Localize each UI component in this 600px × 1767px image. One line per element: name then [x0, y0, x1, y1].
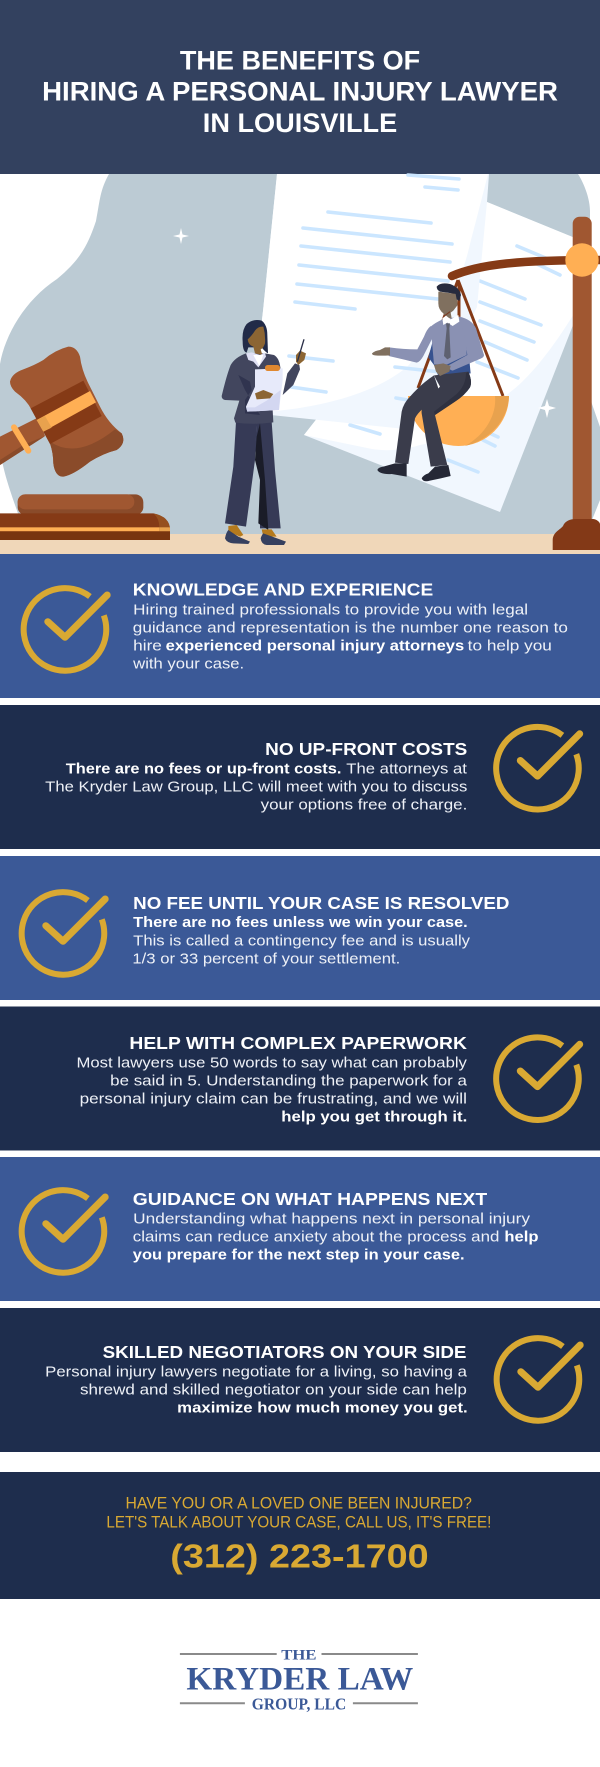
title	[42, 46, 558, 138]
heading: SKILLED NEGOTIATORS ON YOUR SIDE	[103, 1342, 467, 1362]
panel: illustration	[0, 174, 600, 554]
text block	[45, 760, 468, 813]
text block: help	[504, 1228, 538, 1245]
text block: experienced personal injury attorneys	[166, 637, 464, 654]
heading: GUIDANCE ON WHAT HAPPENS NEXT	[133, 1189, 488, 1209]
panel: knowledge and experience	[0, 554, 600, 698]
text block: claims can reduce anxiety about the process and	[133, 1228, 499, 1245]
logo: The Kryder Law Group, LLC: KRYDER LAW	[186, 1661, 413, 1697]
text block: maximize how much money you get.	[177, 1399, 468, 1416]
title: IN LOUISVILLE	[203, 108, 397, 138]
panel: guidance on what happens next	[0, 1157, 600, 1301]
text block: Understanding what happens next in personal injury	[133, 1210, 531, 1227]
panel: call to action	[0, 1472, 600, 1599]
panel: title header	[0, 0, 600, 174]
heading: HELP WITH COMPLEX PAPERWORK	[129, 1033, 467, 1053]
text block: to help you	[468, 637, 552, 654]
icon: gold check circle	[497, 1338, 580, 1421]
text block: with your case.	[132, 655, 244, 672]
text block: your options free of charge.	[261, 796, 467, 813]
text block: help you get through it.	[281, 1108, 467, 1125]
panel: skilled negotiators on your side	[0, 1308, 600, 1452]
title: THE BENEFITS OF	[180, 46, 420, 76]
text block: Personal injury lawyers negotiate for a living, so having a	[45, 1363, 468, 1380]
text block: hire	[133, 637, 162, 654]
title: HIRING A PERSONAL INJURY LAWYER	[42, 77, 558, 107]
text block	[132, 914, 471, 967]
icon: gold check circle	[496, 727, 580, 810]
text block: invitation: HAVE YOU OR A LOVED ONE BEEN INJURED?	[126, 1495, 472, 1513]
text block: There are no fees or up-front costs.	[66, 760, 341, 777]
figure: woman with clipboard	[222, 320, 306, 545]
phone number: (312) 223-1700	[170, 1537, 429, 1574]
icon: sparkle right	[538, 399, 556, 418]
text block	[45, 1363, 468, 1416]
text block: The attorneys at	[346, 760, 468, 777]
text block	[132, 601, 568, 672]
text block: There are no fees unless we win your case.	[133, 914, 468, 931]
panel: help with complex paperwork	[0, 1006, 600, 1150]
heading: NO UP-FRONT COSTS	[265, 739, 467, 759]
icon: scale of justice	[408, 217, 600, 550]
icon: front document sheet	[251, 174, 489, 429]
text block	[133, 1210, 539, 1263]
logo: The Kryder Law Group, LLC: THE	[281, 1648, 316, 1664]
text block: 1/3 or 33 percent of your settlement.	[132, 950, 400, 967]
text block: The Kryder Law Group, LLC will meet with you to discuss	[45, 778, 467, 795]
logo: The Kryder Law Group, LLC	[180, 1648, 418, 1714]
text block: invitation: LET'S TALK ABOUT YOUR CASE, CALL US, IT'S FREE!	[106, 1514, 491, 1532]
text block: be said in 5. Understanding the paperwork for a	[110, 1072, 468, 1089]
text block: invitation	[106, 1495, 491, 1532]
text block: Most lawyers use 50 words to say what can probably	[76, 1054, 467, 1071]
text block: Hiring trained professionals to provide you with legal	[133, 601, 528, 618]
heading: NO FEE UNTIL YOUR CASE IS RESOLVED	[133, 893, 509, 913]
text block: guidance and representation is the number one reason to	[133, 619, 568, 636]
icon: gavel	[0, 347, 170, 540]
icon: gold check circle	[22, 1190, 105, 1273]
text block: This is called a contingency fee and is usually	[133, 932, 471, 949]
icon: sparkle left	[173, 228, 189, 244]
icon: gold check circle	[22, 892, 105, 975]
figure: man sitting on scale	[372, 283, 484, 481]
text block: personal injury claim can be frustrating, and we will	[80, 1090, 467, 1107]
panel: no up-front costs	[0, 705, 600, 849]
icon: back document sheet	[304, 202, 575, 512]
heading: KNOWLEDGE AND EXPERIENCE	[133, 580, 433, 600]
text block	[76, 1054, 468, 1125]
logo: The Kryder Law Group, LLC: GROUP, LLC	[252, 1695, 346, 1714]
text block: you prepare for the next step in your case.	[133, 1246, 465, 1263]
panel: no fee until your case is resolved	[0, 856, 600, 1000]
icon: gold check circle	[24, 588, 107, 671]
icon: gold check circle	[496, 1037, 580, 1120]
text block: shrewd and skilled negotiator on your side can help	[80, 1381, 467, 1398]
